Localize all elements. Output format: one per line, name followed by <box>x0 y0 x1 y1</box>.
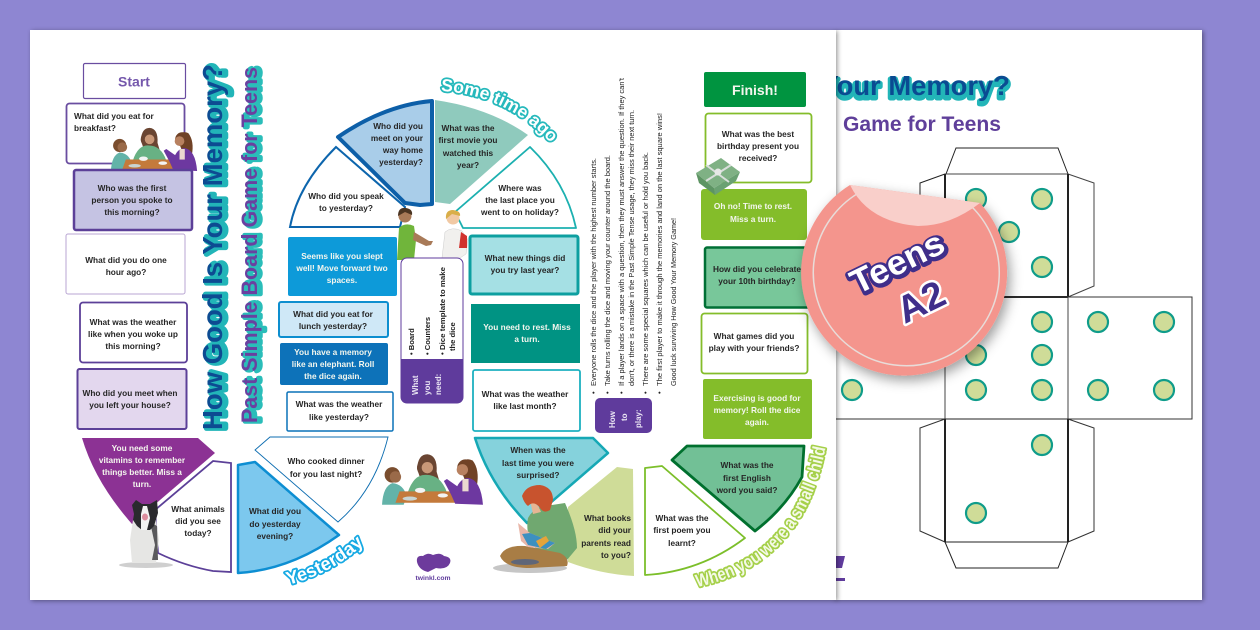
card: left your house <box>78 369 186 429</box>
sector: first movie: watched this <box>442 148 494 158</box>
text block: how to play rules: Good luck surviving How Good Your Memory Game! <box>669 218 678 386</box>
sector: parents read: parents read <box>581 538 631 548</box>
card: need to rest: You need to rest. Miss <box>483 322 571 332</box>
section label: some time ago: Some time ago <box>440 77 558 142</box>
text block: how to play rules: • <box>617 391 626 394</box>
panel: what you need <box>401 258 463 403</box>
sector: first movie: What was the <box>441 123 495 133</box>
card: weather yesterday: like yesterday? <box>309 412 369 422</box>
title continuation <box>836 76 1011 106</box>
panel: dice template page <box>834 28 1206 604</box>
card: lunch <box>279 302 388 337</box>
sector: way home <box>338 101 432 205</box>
card: one hour ago <box>66 234 185 294</box>
sector: yesterday evening: evening? <box>257 531 293 541</box>
card: weather last month: like last month? <box>493 401 557 411</box>
card: weather yesterday <box>287 392 393 431</box>
card: slept well: spaces. <box>327 275 357 285</box>
card: time to rest: Miss a turn. <box>730 214 776 224</box>
card: weather this morning <box>80 302 187 362</box>
sector: way home: yesterday? <box>379 157 423 167</box>
sector: speak to yesterday: to yesterday? <box>319 203 373 213</box>
sector: holiday: went to on holiday? <box>480 207 559 217</box>
card: one hour ago: hour ago? <box>106 267 146 277</box>
title continuation: How Good Is Your Memory? <box>646 70 1010 101</box>
sector: holiday: Where was <box>498 183 542 193</box>
card: time to rest: Oh no! Time to rest. <box>714 201 792 211</box>
card: breakfast: What did you eat for <box>74 111 155 121</box>
sector: first movie: first movie you <box>438 135 498 145</box>
section label: when you were a small child: When you were a small child <box>692 444 828 588</box>
panel: board game page <box>30 30 836 600</box>
materials list: • Dice template to make <box>438 267 447 355</box>
box: how to play label: to <box>620 413 629 421</box>
text block: how to play rules: Everyone rolls the dice and the player with the highest number starts. <box>589 158 598 386</box>
card: best birthday present: received? <box>739 153 777 163</box>
card: exercising: Exercising is good for <box>713 393 801 403</box>
sector: vitamins: vitamins to remember <box>99 455 186 465</box>
sector: first movie <box>435 100 528 204</box>
text block: how to play rules: The first player to make it through the memories and land on the last square wins! <box>655 113 664 386</box>
sector: holiday: the last place you <box>485 195 555 205</box>
badge text: Teens: Teens <box>844 224 951 302</box>
sector: first english word <box>672 446 804 531</box>
card: elephant memory <box>280 343 388 385</box>
sector: cooked dinner <box>255 437 388 522</box>
text block: how to play rules: • <box>589 391 598 394</box>
sector: first poem: What was the <box>655 513 709 523</box>
card: exercising: again. <box>745 417 769 427</box>
text block: how to play rules: Take turns rolling the dice and moving your counter around the board. <box>603 155 612 386</box>
card: breakfast: breakfast? <box>74 123 116 133</box>
badge text: A2: A2 <box>890 273 952 332</box>
materials list: • Counters <box>423 317 432 355</box>
card: need to rest: a turn. <box>514 334 540 344</box>
card: games with friends: What games did you <box>714 331 794 341</box>
logo: twinkl: twinkl.com <box>416 575 451 582</box>
badge: teens A2 sticker <box>801 185 1007 376</box>
logo: twinkl <box>416 554 451 582</box>
box: how to play label: play: <box>634 409 643 428</box>
what you need text: you <box>423 381 432 395</box>
card: weather this morning: this morning? <box>105 341 161 351</box>
sector: parents read: to you? <box>601 550 631 560</box>
sector: speak to yesterday: Who did you speak <box>308 191 384 201</box>
sticker peel <box>850 185 980 226</box>
card: slept well: Seems like you slept <box>301 251 383 261</box>
sector: surprised: last time you were <box>502 458 574 468</box>
logo remnant <box>836 556 845 581</box>
sector: animals: What animals <box>171 504 225 514</box>
box: how to play label: How <box>608 410 617 428</box>
card: new things: What new things did <box>485 253 565 263</box>
section label: yesterday: Yesterday <box>283 534 364 586</box>
materials list <box>407 267 457 355</box>
heading: subtitle vertical: Past Simple Board Game for Teens <box>237 67 262 423</box>
card: finish <box>704 72 806 107</box>
card: lunch: lunch yesterday? <box>299 321 367 331</box>
text block: how to play rules <box>589 77 678 394</box>
text block: how to play rules: don't, or there is a mistake in the Past Simple Tense usage, they miss their next turn. <box>627 110 636 386</box>
card: breakfast <box>66 104 184 164</box>
icon: gift box <box>696 158 740 195</box>
heading: main title vertical: How Good Is Your Memory? <box>200 64 232 430</box>
card: best birthday present: birthday present you <box>717 141 799 151</box>
card: elephant memory: like an elephant. Roll <box>292 359 374 369</box>
dice net <box>822 148 1192 568</box>
card: new things: you try last year? <box>491 265 559 275</box>
sector: vitamins: things better. Miss a <box>102 467 182 477</box>
sector: first english word: first English <box>723 473 771 483</box>
card: weather last month <box>473 370 580 431</box>
illustration: family at table centre <box>382 454 483 505</box>
card: slept well <box>288 237 397 296</box>
card: start: Start <box>118 74 150 90</box>
sector: parents read: did your <box>598 525 632 535</box>
card: time to rest <box>701 189 807 240</box>
subtitle continuation: Game for Teens <box>843 112 1001 136</box>
sector: holiday <box>455 147 576 228</box>
box: how to play label <box>595 398 652 433</box>
illustration: two teens talking <box>397 208 468 260</box>
sector: yesterday evening: do yesterday <box>249 519 301 529</box>
dice dots <box>842 189 1174 523</box>
materials list: • Board <box>407 328 416 355</box>
card: elephant memory: the dice again. <box>304 371 362 381</box>
card: weather this morning: like when you woke up <box>88 329 178 339</box>
sector: first english word: What was the <box>720 460 774 470</box>
sector: yesterday evening <box>238 462 339 573</box>
sector: surprised <box>475 438 608 523</box>
badge text: A2: A2 <box>890 273 952 332</box>
sector: animals: today? <box>184 528 212 538</box>
text block: how to play rules: There are some special squares which can be useful or hold you back. <box>641 152 650 386</box>
card: left your house: Who did you meet when <box>83 388 177 398</box>
card: new things <box>470 236 578 294</box>
illustration: dog <box>119 500 173 568</box>
card: exercising <box>703 379 812 439</box>
sector: speak to yesterday <box>290 147 405 227</box>
text block: how to play rules: • <box>655 391 664 394</box>
sector: first poem: first poem you <box>653 525 711 535</box>
sector: surprised: surprised? <box>517 470 559 480</box>
sector: first poem <box>645 466 745 575</box>
sector: cooked dinner: for you last night? <box>290 469 362 479</box>
sector: vitamins: turn. <box>133 479 151 489</box>
card: 10th birthday: How did you celebrate <box>713 264 801 274</box>
card: elephant memory: You have a memory <box>294 347 372 357</box>
heading: subtitle vertical: Past Simple Board Game for Teens <box>240 67 266 423</box>
card: best birthday present: What was the best <box>722 129 794 139</box>
sector: vitamins <box>82 438 215 524</box>
what you need text: need: <box>434 374 443 395</box>
heading: main title vertical: How Good Is Your Memory? <box>197 64 228 430</box>
card: games with friends: play with your friends? <box>709 343 799 353</box>
card: weather yesterday: What was the weather <box>296 399 383 409</box>
sector: way home: Who did you <box>373 121 423 131</box>
card: 10th birthday <box>705 248 811 308</box>
card: first person: Who was the first <box>98 183 167 193</box>
sector: animals: did you see <box>175 516 221 526</box>
card: lunch: What did you eat for <box>293 309 374 319</box>
card: one hour ago: What did you do one <box>85 255 167 265</box>
sector: first movie: year? <box>457 160 479 170</box>
panel: board contents <box>66 62 828 588</box>
text block: how to play rules: • <box>603 391 612 394</box>
sector: parents read <box>568 467 634 576</box>
badge text: Teens: Teens <box>845 225 952 303</box>
text block: how to play rules: If a player lands on a space with a question, then they must answer the question. If they can't <box>617 77 626 386</box>
card: need to rest <box>471 304 580 363</box>
sector: surprised: When was the <box>510 445 566 455</box>
sector: vitamins: You need some <box>112 443 173 453</box>
card: slept well: well! Move forward two <box>295 263 388 273</box>
card: weather last month: What was the weather <box>482 389 569 399</box>
illustration: boy reading <box>493 485 577 573</box>
card: left your house: you left your house? <box>89 400 171 410</box>
sector: animals <box>155 461 231 572</box>
sector: way home: meet on your <box>371 133 424 143</box>
card: first person: this morning? <box>104 207 160 217</box>
what you need text: What <box>411 375 420 395</box>
card: exercising: memory! Roll the dice <box>714 405 801 415</box>
materials list: the dice <box>448 322 457 351</box>
sector: cooked dinner: Who cooked dinner <box>288 456 365 466</box>
sector: first english word: word you said? <box>716 485 777 495</box>
card: first person: person you spoke to <box>91 195 173 205</box>
card: games with friends <box>702 314 808 374</box>
card: 10th birthday: your 10th birthday? <box>718 276 796 286</box>
card: weather this morning: What was the weather <box>90 317 177 327</box>
card: best birthday present <box>706 114 812 182</box>
card: first person <box>74 170 192 230</box>
card: finish: Finish! <box>732 82 778 98</box>
title continuation: How Good Is Your Memory? <box>646 73 1010 104</box>
card: start <box>84 64 186 98</box>
sector: parents read: What books <box>584 513 631 523</box>
text block: how to play rules: • <box>641 391 650 394</box>
sector: first poem: learnt? <box>668 538 696 548</box>
sector: way home: way home <box>382 145 423 155</box>
what you need text <box>411 374 443 395</box>
illustration: family at table <box>111 128 197 171</box>
sector: yesterday evening: What did you <box>249 506 301 516</box>
